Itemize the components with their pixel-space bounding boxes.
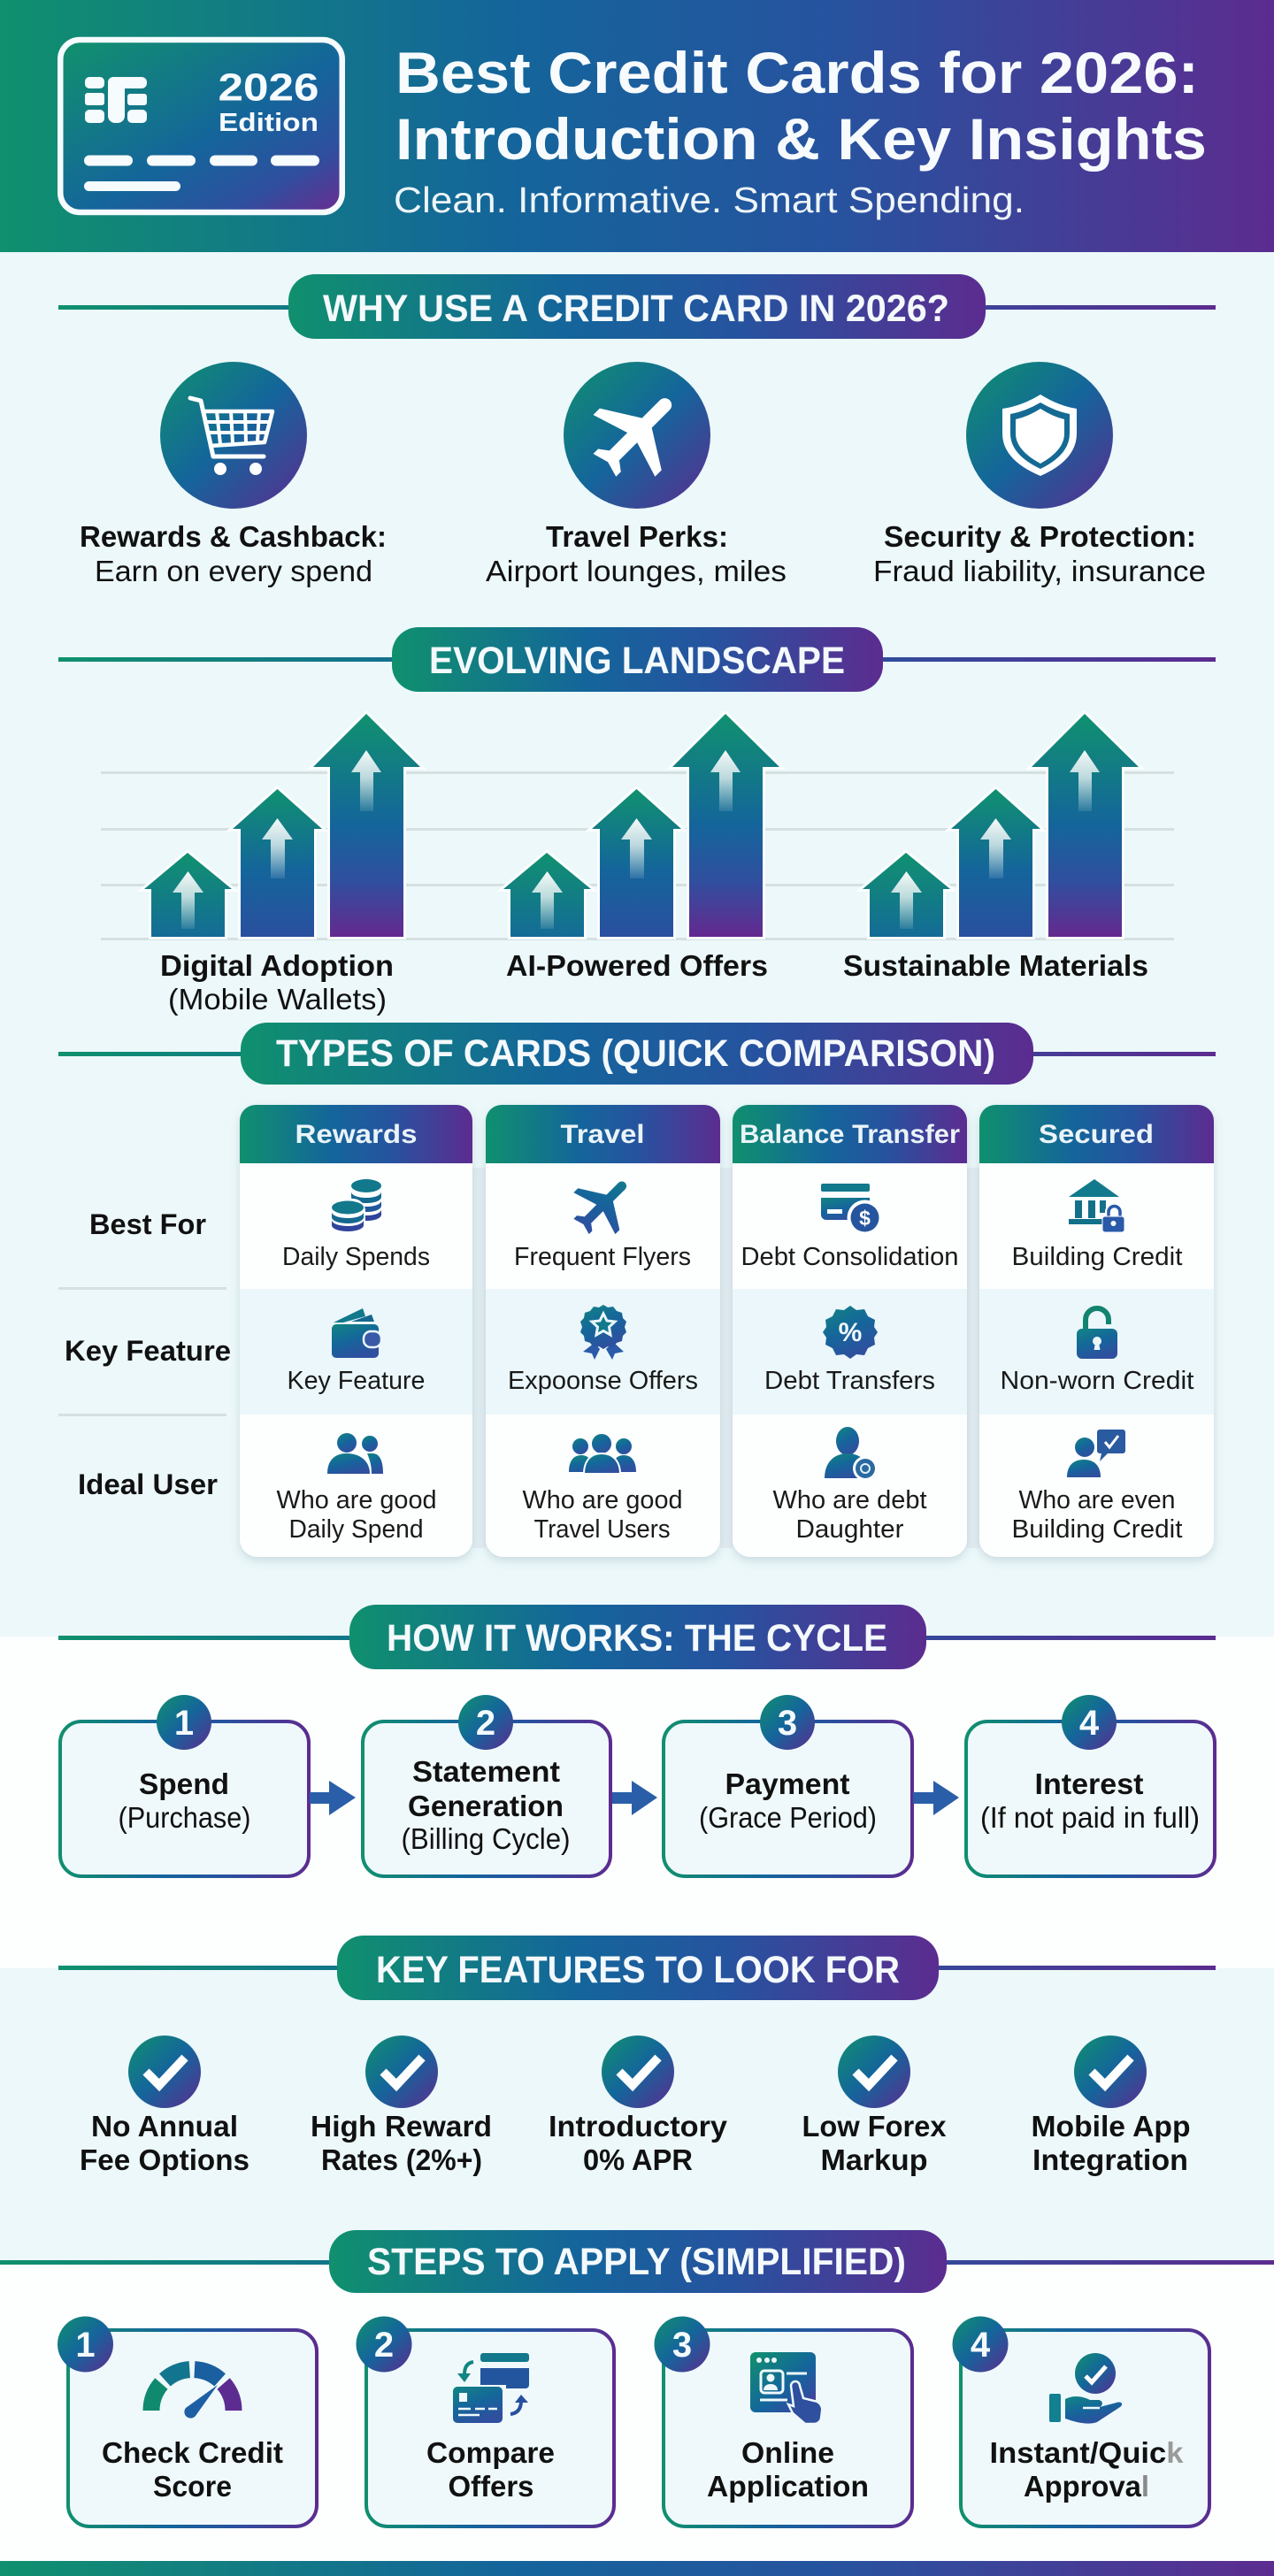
- icon: hand with check: [1049, 2353, 1122, 2424]
- icon: open padlock: [1077, 1308, 1117, 1359]
- step 4: interest: 4: [1079, 1704, 1100, 1743]
- benefit: rewards and cashback: Rewards & Cashback:: [80, 520, 387, 553]
- feature: mobile app integration: [1032, 2036, 1191, 2176]
- arrow group: sustainable materials: [843, 714, 1148, 982]
- column gaps: [472, 1168, 979, 1548]
- column: balance transfer: Debt Transfers: [764, 1367, 935, 1395]
- column: balance transfer: [733, 1105, 967, 1557]
- step 3: payment: 3: [778, 1704, 797, 1743]
- section heading: key features: [58, 1936, 1216, 2000]
- step 3: online application: Online: [741, 2436, 834, 2469]
- section heading: why use a credit card: WHY USE A CREDIT CARD IN 2026?: [323, 288, 949, 330]
- step 4: interest: Interest: [1035, 1767, 1143, 1800]
- icon: credit card 2026 edition: Edition: [219, 109, 318, 137]
- column: travel: Travel Users: [534, 1515, 671, 1544]
- arrow group: digital adoption: Digital Adoption: [160, 949, 394, 982]
- step 4: instant approval: [952, 2316, 1209, 2526]
- feature: low forex markup: Low Forex: [802, 2110, 947, 2143]
- icon: comparing cards: [453, 2353, 529, 2423]
- icon: credit card 2026 edition: 2026: [218, 65, 318, 110]
- feature: low forex markup: [802, 2036, 947, 2176]
- icon: card with dollar coin: [821, 1184, 883, 1235]
- icon: wallet: [332, 1308, 381, 1358]
- arrow group: AI-powered offers: AI-Powered Offers: [506, 949, 768, 982]
- step 1: spend: Spend: [139, 1767, 229, 1800]
- step 4: instant approval: Instant/Quic k: [989, 2436, 1184, 2469]
- benefit: travel perks: Travel Perks:: [546, 520, 728, 553]
- column: rewards: Key Feature: [287, 1367, 425, 1395]
- icon: shopping cart: [190, 398, 272, 475]
- column: secured: [979, 1105, 1214, 1557]
- step 3: online application: Application: [707, 2470, 869, 2503]
- icon: two users: [327, 1433, 383, 1474]
- feature: introductory APR: [549, 2036, 728, 2176]
- title: [395, 40, 1207, 172]
- section heading: evolving landscape: [58, 627, 1216, 692]
- arrow group: AI-powered offers: [503, 714, 779, 982]
- section heading: evolving landscape: EVOLVING LANDSCAPE: [429, 640, 845, 682]
- icon: online form with pointing hand: [750, 2352, 822, 2424]
- section heading: key features: KEY FEATURES TO LOOK FOR: [376, 1949, 900, 1991]
- feature: no annual fee: No Annual: [91, 2110, 238, 2143]
- panel: key features: [80, 2036, 1191, 2176]
- feature: introductory APR: Introductory: [549, 2110, 728, 2143]
- column: balance transfer: Daughter: [796, 1515, 904, 1544]
- column: secured: Building Credit: [1012, 1243, 1182, 1271]
- row labels: Ideal User: [78, 1468, 218, 1500]
- section heading: types of cards: [58, 1023, 1216, 1085]
- icon: card with dollar coin: $: [859, 1207, 871, 1230]
- step 1: check credit score: 1: [75, 2326, 96, 2365]
- arrow group: digital adoption: (Mobile Wallets): [168, 983, 387, 1016]
- step 2: compare offers: Offers: [448, 2470, 534, 2503]
- icon: three users: [569, 1433, 636, 1474]
- column: balance transfer: Balance Transfer: [740, 1120, 960, 1149]
- icon: award ribbon: [580, 1305, 626, 1360]
- step 2: statement generation: Statement: [412, 1755, 560, 1788]
- column: travel: Travel: [561, 1120, 644, 1149]
- feature: no annual fee: Fee Options: [80, 2143, 249, 2176]
- step 4: instant approval: 4: [971, 2326, 991, 2365]
- row labels: [58, 1208, 231, 1500]
- feature: high reward rates: Rates (2%+): [321, 2143, 482, 2176]
- icon: coins: [329, 1179, 381, 1233]
- arrow group: sustainable materials: Sustainable Materials: [843, 949, 1148, 982]
- section heading: steps to apply: [0, 2230, 1274, 2293]
- panel: steps to apply: [58, 2316, 1209, 2526]
- section heading: why use a credit card: [58, 274, 1216, 339]
- icon: airplane: [561, 1162, 646, 1247]
- column: rewards: Rewards: [295, 1120, 418, 1149]
- step 2: compare offers: 2: [374, 2326, 394, 2365]
- step 3: online application: 3: [672, 2326, 692, 2365]
- benefit: rewards and cashback: Earn on every spend: [95, 555, 372, 587]
- column: travel: [486, 1105, 720, 1557]
- step 2: compare offers: [356, 2316, 614, 2526]
- column: rewards: Who are good: [276, 1486, 437, 1514]
- section heading: steps to apply: STEPS TO APPLY (SIMPLIFIED): [367, 2241, 906, 2283]
- icon: airplane: [573, 369, 701, 496]
- feature: low forex markup: Markup: [821, 2143, 927, 2176]
- section heading: how it works: HOW IT WORKS: THE CYCLE: [387, 1617, 887, 1660]
- footer bar: [0, 2561, 1274, 2576]
- step 3: payment: [664, 1695, 912, 1876]
- step 1: check credit score: Check Credit: [102, 2436, 283, 2469]
- row labels: Key Feature: [65, 1335, 231, 1367]
- comparison table: [58, 1105, 1214, 1557]
- benefit: travel perks: [486, 362, 787, 587]
- benefit: security and protection: Security & Protection:: [884, 520, 1196, 553]
- benefit: security and protection: Fraud liability, insurance: [873, 555, 1206, 587]
- arrow: spend to statement: [310, 1781, 356, 1815]
- feature: introductory APR: 0% APR: [583, 2143, 693, 2176]
- column: secured: Building Credit: [1012, 1515, 1182, 1544]
- column: rewards: Daily Spend: [288, 1515, 423, 1544]
- step 1: spend: 1: [174, 1704, 194, 1743]
- feature: mobile app integration: Mobile App: [1032, 2110, 1191, 2143]
- panel: how it works cycle: [60, 1695, 1215, 1876]
- step 1: check credit score: [58, 2316, 317, 2526]
- arrow: statement to payment: [612, 1781, 657, 1815]
- step 2: statement generation: [363, 1695, 610, 1876]
- icon: percent burst: [823, 1306, 878, 1359]
- step 4: instant approval: Approval: [1024, 2470, 1149, 2503]
- step 2: statement generation: 2: [476, 1704, 495, 1743]
- column: balance transfer: Who are debt: [773, 1486, 927, 1514]
- step 3: online application: [655, 2316, 912, 2526]
- step 2: statement generation: Generation: [408, 1790, 564, 1822]
- icon: gauge: [151, 2370, 234, 2419]
- chart: evolving landscape rising arrows: [101, 714, 1174, 1016]
- panel: why use a credit card: [80, 362, 1206, 587]
- section heading: how it works: [58, 1605, 1216, 1669]
- step 1: check credit score: Score: [153, 2470, 232, 2503]
- arrow group: digital adoption: [144, 714, 420, 1016]
- icon: percent burst: %: [839, 1318, 862, 1347]
- step 3: payment: (Grace Period): [699, 1801, 877, 1834]
- column: travel: Expoonse Offers: [508, 1367, 698, 1395]
- column: rewards: Daily Spends: [282, 1243, 430, 1271]
- feature: high reward rates: High Reward: [311, 2110, 492, 2143]
- step 4: interest: (If not paid in full): [980, 1801, 1200, 1834]
- arrow: payment to interest: [913, 1781, 959, 1815]
- header banner: [0, 0, 1274, 252]
- step 2: statement generation: (Billing Cycle): [402, 1822, 570, 1855]
- column: balance transfer: Debt Consolidation: [741, 1243, 959, 1271]
- title: Best Credit Cards for 2026:: [395, 40, 1199, 105]
- column: secured: Secured: [1039, 1120, 1154, 1149]
- step 3: payment: Payment: [725, 1767, 850, 1800]
- column: travel: Who are good: [522, 1486, 683, 1514]
- column: rewards: [240, 1105, 472, 1557]
- icon: person with coin: [825, 1427, 878, 1481]
- column: secured: Who are even: [1019, 1486, 1175, 1514]
- step 4: interest: [966, 1695, 1215, 1876]
- feature: no annual fee: [80, 2036, 249, 2176]
- step 2: compare offers: Compare: [426, 2436, 555, 2469]
- icon: credit card 2026 edition: [60, 40, 342, 212]
- title: Introduction & Key Insights: [395, 106, 1207, 172]
- column: travel: Frequent Flyers: [514, 1243, 691, 1271]
- benefit: rewards and cashback: [80, 362, 387, 587]
- feature: mobile app integration: Integration: [1032, 2143, 1188, 2176]
- subtitle: Clean. Informative. Smart Spending.: [394, 180, 1025, 220]
- section heading: types of cards: TYPES OF CARDS (QUICK COMPARISON): [276, 1032, 995, 1075]
- feature: high reward rates: [311, 2036, 492, 2176]
- icon: person with message check: [1067, 1430, 1125, 1477]
- step 1: spend: [60, 1695, 309, 1876]
- step 1: spend: (Purchase): [119, 1801, 251, 1834]
- benefit: travel perks: Airport lounges, miles: [486, 555, 787, 587]
- icon: bank with lock: [1069, 1179, 1124, 1232]
- column: secured: Non-worn Credit: [1000, 1367, 1194, 1395]
- row labels: Best For: [89, 1208, 206, 1240]
- benefit: security and protection: [873, 362, 1206, 587]
- icon: shield: [1002, 395, 1077, 476]
